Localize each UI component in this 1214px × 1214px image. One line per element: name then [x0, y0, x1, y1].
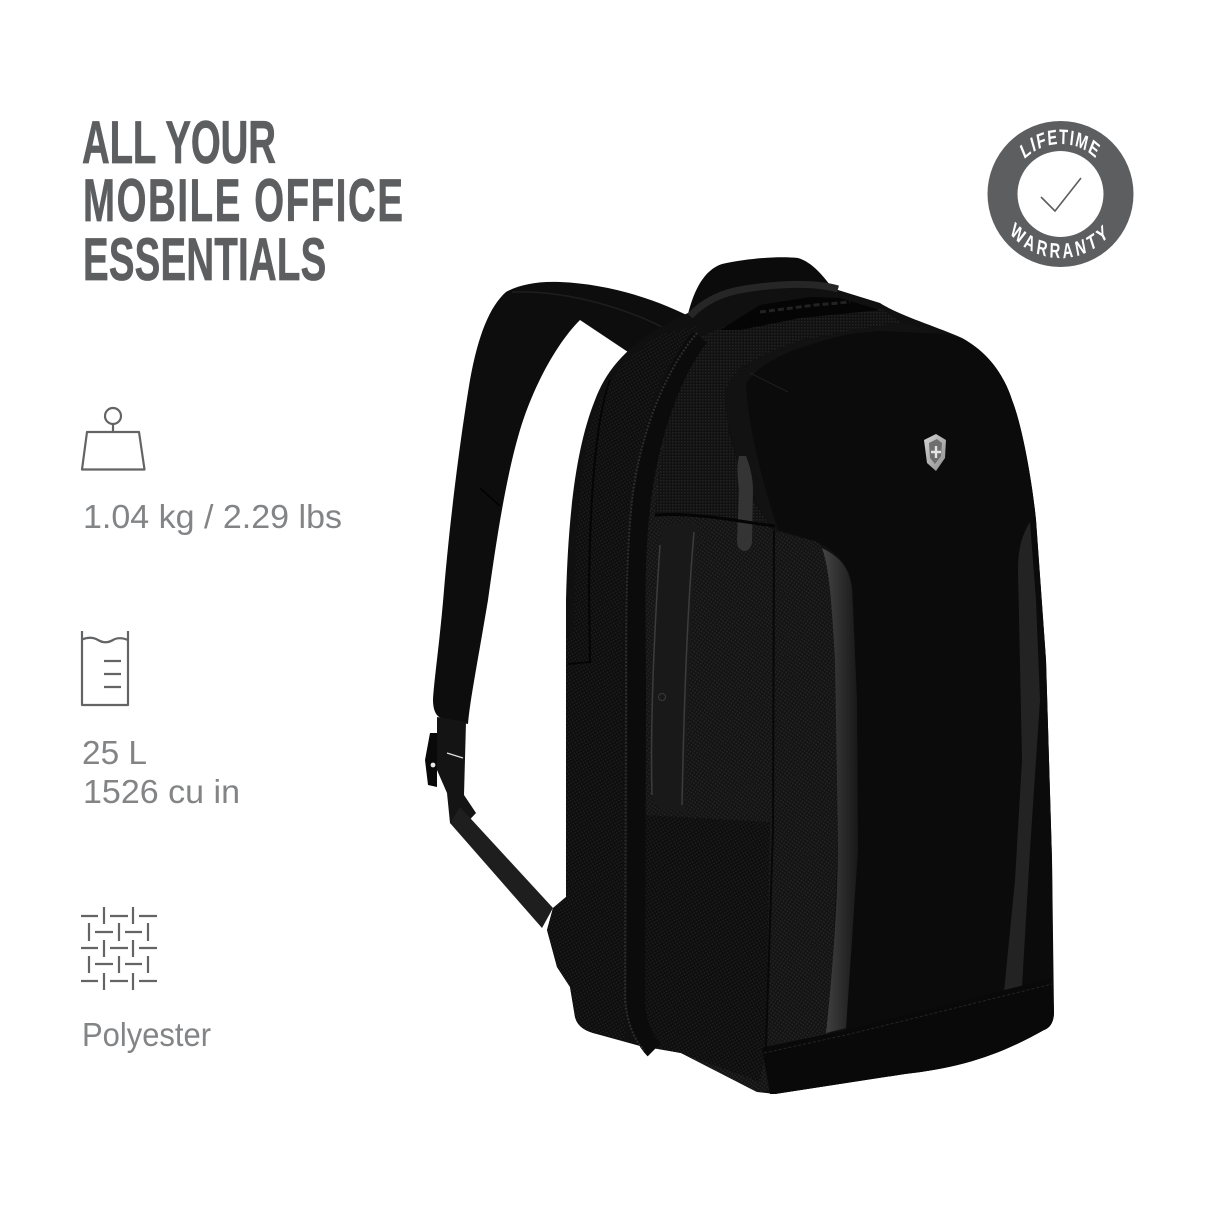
front panel rim	[724, 322, 1012, 585]
bottom band	[762, 978, 1054, 1094]
leather strip left	[822, 548, 858, 1033]
back pocket zipper	[568, 380, 610, 664]
top zipper and handle	[690, 284, 880, 330]
upper side weave darker	[655, 308, 900, 522]
volume text: 25 L	[82, 734, 147, 771]
volume text	[82, 734, 240, 810]
zipper teeth	[625, 333, 697, 1050]
icon: lifetime warranty badge: LIFETIME	[1020, 129, 1100, 159]
strap buckle	[425, 733, 463, 787]
strap seam	[512, 292, 668, 330]
main zipper	[636, 337, 700, 1050]
icon: lifetime warranty badge: WARRANTY	[1012, 222, 1106, 258]
pocket zipper tape	[655, 514, 775, 526]
side panel seam	[766, 530, 774, 1048]
title: MOBILE OFFICE	[83, 166, 403, 234]
logo shield	[924, 434, 946, 471]
material text: Polyester	[82, 1016, 211, 1053]
bag body silhouette	[547, 282, 1054, 1094]
title: ESSENTIALS	[83, 225, 326, 293]
volume text: 1526 cu in	[83, 773, 240, 810]
leather strip right	[1004, 522, 1040, 992]
top haul loop	[688, 257, 838, 330]
strap crease	[480, 488, 500, 506]
icon: volume beaker	[82, 631, 128, 705]
front panel fold mark	[750, 373, 788, 392]
handle highlight	[652, 532, 694, 805]
strap webbing	[437, 717, 476, 830]
front panel	[746, 331, 1053, 1030]
shoulder strap	[433, 282, 700, 724]
bottom band stitch	[764, 984, 1052, 1053]
title: ALL YOUR	[82, 108, 276, 176]
icon: woven material	[81, 907, 157, 990]
back panel fabric	[547, 325, 700, 1041]
backpack illustration	[425, 257, 1054, 1094]
side panel fabric	[632, 308, 900, 1092]
side pocket leather handle	[650, 523, 698, 812]
icon: weight	[82, 408, 144, 470]
lower strap	[450, 807, 553, 928]
title	[82, 108, 403, 293]
zipper pull	[737, 456, 753, 551]
handle logo	[658, 694, 666, 700]
weight text: 1.04 kg / 2.29 lbs	[83, 498, 342, 535]
lower side pocket	[642, 815, 770, 1082]
icon: lifetime warranty badge	[988, 121, 1134, 267]
